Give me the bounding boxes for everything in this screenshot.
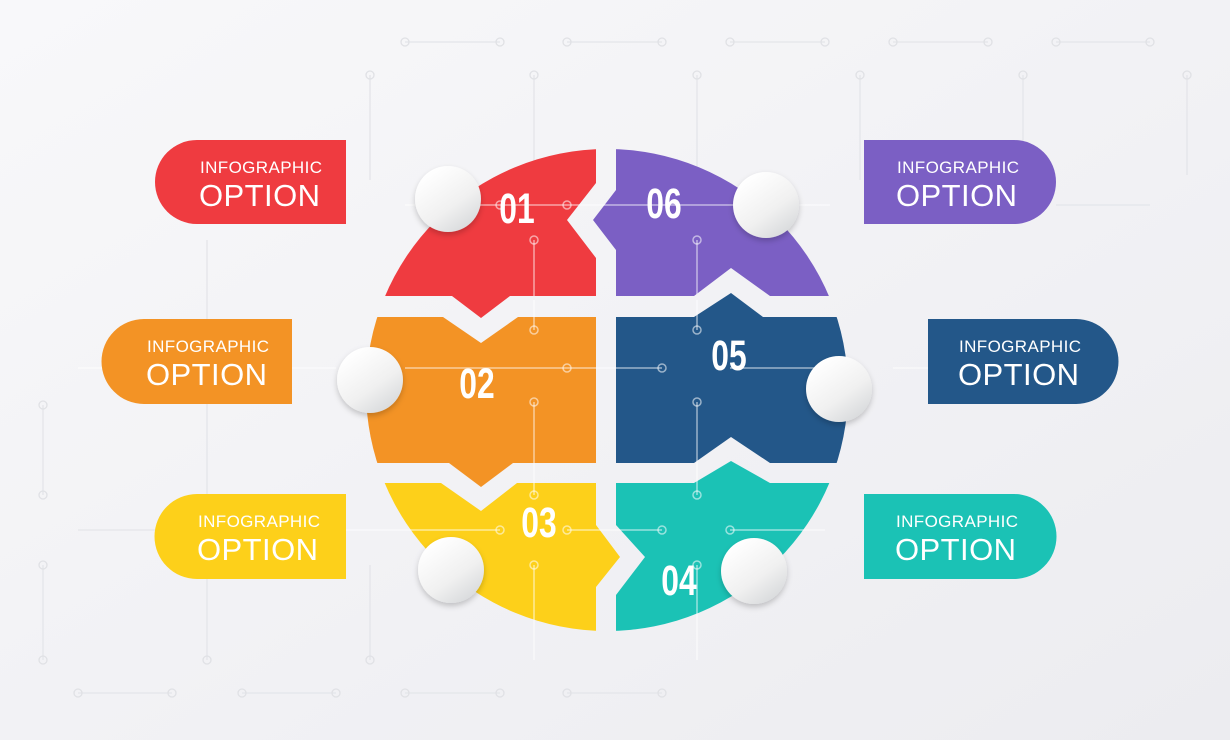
segment 02 orange: [367, 317, 596, 487]
bubble 02: [337, 347, 403, 413]
label 02 orange: OPTION: [146, 357, 267, 392]
label 06 purple: INFOGRAPHIC: [897, 158, 1019, 177]
number 04: 04: [661, 557, 697, 605]
label 06 purple: OPTION: [896, 178, 1017, 213]
segment 05 blue: [616, 293, 846, 463]
circle diagram: [367, 149, 846, 631]
label 04 teal: OPTION: [895, 532, 1016, 567]
number 02: 02: [459, 360, 495, 408]
label 03 yellow: OPTION: [197, 532, 318, 567]
label 02 orange: [102, 319, 292, 404]
label 01 red: OPTION: [199, 178, 320, 213]
label 01 red: [155, 140, 346, 224]
number 01: 01: [499, 185, 535, 233]
label 03 yellow: INFOGRAPHIC: [198, 512, 320, 531]
label 05 blue: INFOGRAPHIC: [959, 337, 1081, 356]
segment 03 yellow: [384, 483, 620, 631]
label 02 orange: INFOGRAPHIC: [147, 337, 269, 356]
segment 04 teal: [616, 461, 830, 631]
label 03 yellow: [155, 494, 346, 579]
label 06 purple: [864, 140, 1056, 224]
bubble 03: [418, 537, 484, 603]
label 05 blue: [928, 319, 1118, 404]
number 05: 05: [711, 332, 747, 380]
label 04 teal: [864, 494, 1056, 579]
bubble 05: [806, 356, 872, 422]
segment 01 red: [385, 149, 596, 318]
label 01 red: INFOGRAPHIC: [200, 158, 322, 177]
segment 06 purple: [593, 149, 829, 296]
label 04 teal: INFOGRAPHIC: [896, 512, 1018, 531]
number 03: 03: [521, 499, 557, 547]
label 05 blue: OPTION: [958, 357, 1079, 392]
bubble 06: [733, 172, 799, 238]
bubble 04: [721, 538, 787, 604]
number 06: 06: [646, 180, 682, 228]
bubble 01: [415, 166, 481, 232]
